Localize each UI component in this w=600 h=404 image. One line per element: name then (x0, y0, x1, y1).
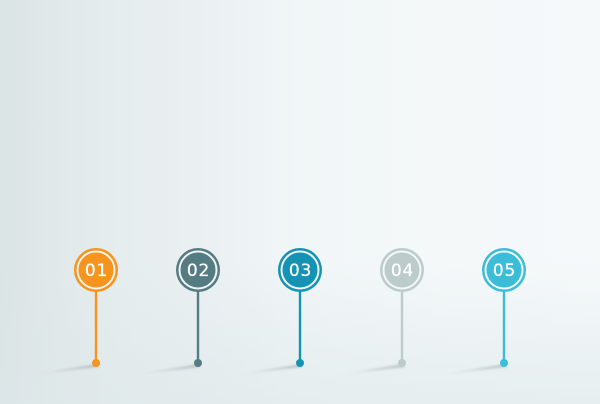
marker 01: 01 (85, 261, 108, 281)
marker 05 (438, 248, 526, 375)
marker 03 (234, 248, 322, 375)
marker 04: 04 (391, 261, 414, 281)
marker 02: 02 (187, 261, 210, 281)
marker 03: 03 (289, 261, 312, 281)
marker 01 (30, 248, 118, 375)
marker 05: 05 (493, 261, 516, 281)
marker 02 (132, 248, 220, 375)
marker 04 (336, 248, 424, 375)
background lower shade (0, 260, 600, 404)
